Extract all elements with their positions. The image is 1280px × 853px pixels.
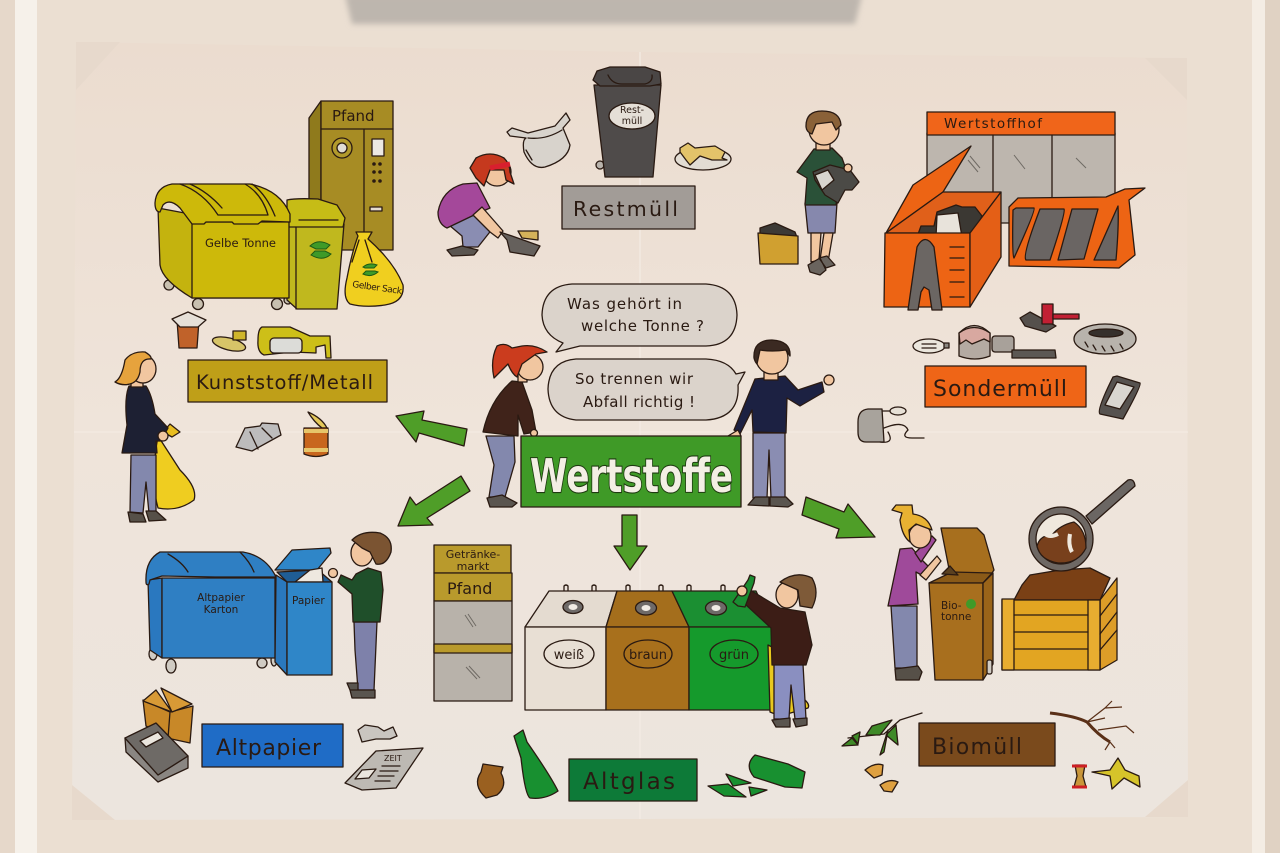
figure: red-haired girl <box>483 344 547 507</box>
icon: large blue bin <box>146 552 277 673</box>
icon: Gelber Sack <box>345 232 403 306</box>
icon: newspaper: ZEIT <box>384 754 402 763</box>
icon: compost crate <box>1002 568 1117 670</box>
icon: shoebox <box>758 223 798 264</box>
callout: answer bubble: Abfall richtig ! <box>583 393 695 411</box>
icon: fish bones on plate <box>675 143 731 170</box>
icon: Getränkemarkt shop: Getränke- <box>446 548 500 561</box>
icon: bare branch <box>1050 701 1134 750</box>
icon: frying pan with food <box>1029 480 1135 571</box>
icon: paint cans and brush <box>959 326 1056 359</box>
icon: large yellow bin <box>155 184 290 310</box>
icon: small blue bin <box>275 548 332 675</box>
heading: Kunststoff/Metall label: Kunststoff/Metall <box>196 371 373 394</box>
icon: Bio-Tonne <box>929 528 994 680</box>
panel: Kunststoff/Metall <box>115 101 403 522</box>
icon: stack of magazines <box>125 723 188 782</box>
icon: Restmüll bin <box>593 67 661 177</box>
arrow: to Kunststoff <box>396 411 467 446</box>
heading: Restmüll label <box>562 186 695 229</box>
icon: glass containers <box>525 585 773 710</box>
icon: Wertstoffhof building: Wertstoffhof <box>944 116 1043 132</box>
figure: boy pointing <box>728 340 834 507</box>
icon: hand mixer <box>858 407 924 442</box>
icon: glass containers: grün <box>719 648 749 663</box>
figure: boy with bottle <box>733 575 816 727</box>
icon: Pfand machine <box>309 101 393 250</box>
icon: Bio-Tonne: Bio- <box>941 600 962 612</box>
icon: light bulb <box>913 339 949 353</box>
panel: Sondermüll <box>858 112 1145 442</box>
icon: small yellow bin <box>284 199 345 309</box>
icon: Wertstoffhof building <box>927 112 1115 223</box>
icon: glass containers: braun <box>629 648 667 663</box>
callout: question bubble: Was gehört in <box>567 295 682 313</box>
icon: Bio-Tonne: tonne <box>941 611 971 623</box>
panel: Altpapier <box>125 532 423 790</box>
icon: brown jar <box>477 764 504 798</box>
icon: open orange container <box>884 146 1001 310</box>
icon: banana peel <box>1092 758 1140 789</box>
heading: Altglas label <box>569 759 697 801</box>
callout: answer bubble: So trennen wir <box>575 370 694 388</box>
icon: apple core <box>1072 765 1087 787</box>
icon: spray bottle <box>258 327 331 358</box>
icon: plastic bag <box>507 113 570 167</box>
heading: Sondermüll label: Sondermüll <box>933 377 1067 402</box>
panel: Biomüll <box>842 480 1140 792</box>
icon: Gelber Sack: Gelber Sack <box>352 280 403 297</box>
icon: tyre <box>1074 324 1136 354</box>
icon: Getränkemarkt shop <box>434 545 512 701</box>
icon: cardboard box <box>143 688 193 743</box>
icon: Restmüll bin: müll <box>622 116 642 127</box>
icon: large blue bin: Altpapier <box>197 592 246 604</box>
icon: Getränkemarkt shop: markt <box>457 560 490 573</box>
panel: centre speech and title <box>396 284 875 570</box>
icon: crumpled paper <box>358 725 397 742</box>
heading: Altglas label: Altglas <box>583 769 675 795</box>
icon: large blue bin: Karton <box>204 604 238 616</box>
icon: Restmüll bin: Rest- <box>620 105 644 116</box>
callout: answer bubble <box>548 359 745 420</box>
icon: orange skip with windows <box>1009 188 1145 268</box>
icon: green twig <box>842 713 922 755</box>
panel: Altglas <box>434 545 816 801</box>
icon: glass containers: weiß <box>554 648 584 663</box>
icon: medicine and pills <box>1020 304 1079 332</box>
icon: lying bottle <box>749 755 805 788</box>
poster sheet <box>72 42 1188 820</box>
icon: green bottle <box>514 730 558 798</box>
figure: boy with broken appliance <box>797 111 859 275</box>
arrow: to Altpapier <box>398 476 470 526</box>
heading: Biomüll label <box>919 723 1055 766</box>
icon: crushed packet <box>236 423 281 451</box>
heading: Altpapier label <box>202 724 343 767</box>
heading: Wertstoffe title <box>521 436 741 507</box>
icon: yoghurt cup <box>172 312 206 348</box>
callout: question bubble <box>542 284 737 352</box>
figure: boy throwing paper <box>328 532 391 698</box>
arrow: to Altglas <box>614 515 647 570</box>
figure: girl with bio bin <box>888 505 941 680</box>
heading: Restmüll label: Restmüll <box>573 197 678 221</box>
icon: large yellow bin: Gelbe Tonne <box>205 236 276 250</box>
icon: broken phone <box>1099 376 1140 419</box>
heading: Kunststoff/Metall label <box>188 360 387 402</box>
icon: tin can <box>304 412 328 456</box>
figure: crouching girl with dustpan <box>438 154 540 256</box>
callout: question bubble: welche Tonne ? <box>581 317 704 335</box>
icon: bottle caps <box>211 331 247 354</box>
icon: egg shells <box>865 764 898 792</box>
heading: Biomüll label: Biomüll <box>932 735 1022 760</box>
panel: Restmüll <box>438 67 859 275</box>
arrow: to Biomüll <box>802 497 875 538</box>
icon: Pfand machine: Pfand <box>332 107 375 125</box>
icon: newspaper <box>345 748 423 790</box>
icon: small blue bin: Papier <box>292 595 325 607</box>
figure: girl with yellow bag <box>115 352 195 522</box>
icon: broken glass <box>708 774 767 797</box>
heading: Wertstoffe title: Wertstoffe <box>530 449 733 503</box>
icon: Getränkemarkt shop: Pfand <box>447 579 492 598</box>
heading: Altpapier label: Altpapier <box>216 736 322 761</box>
heading: Sondermüll label <box>925 366 1086 407</box>
